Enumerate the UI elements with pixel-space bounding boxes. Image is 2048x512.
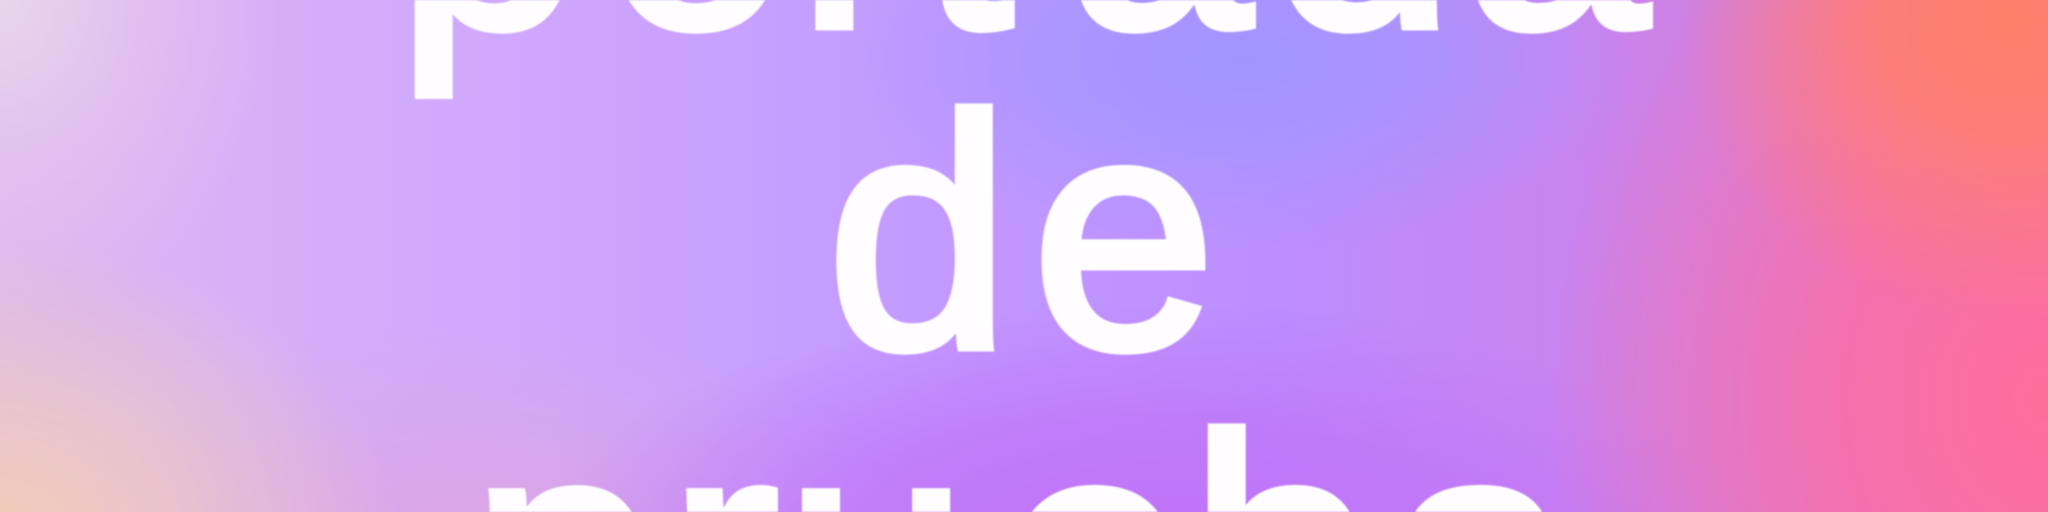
title line 2: de: de bbox=[827, 48, 1216, 417]
